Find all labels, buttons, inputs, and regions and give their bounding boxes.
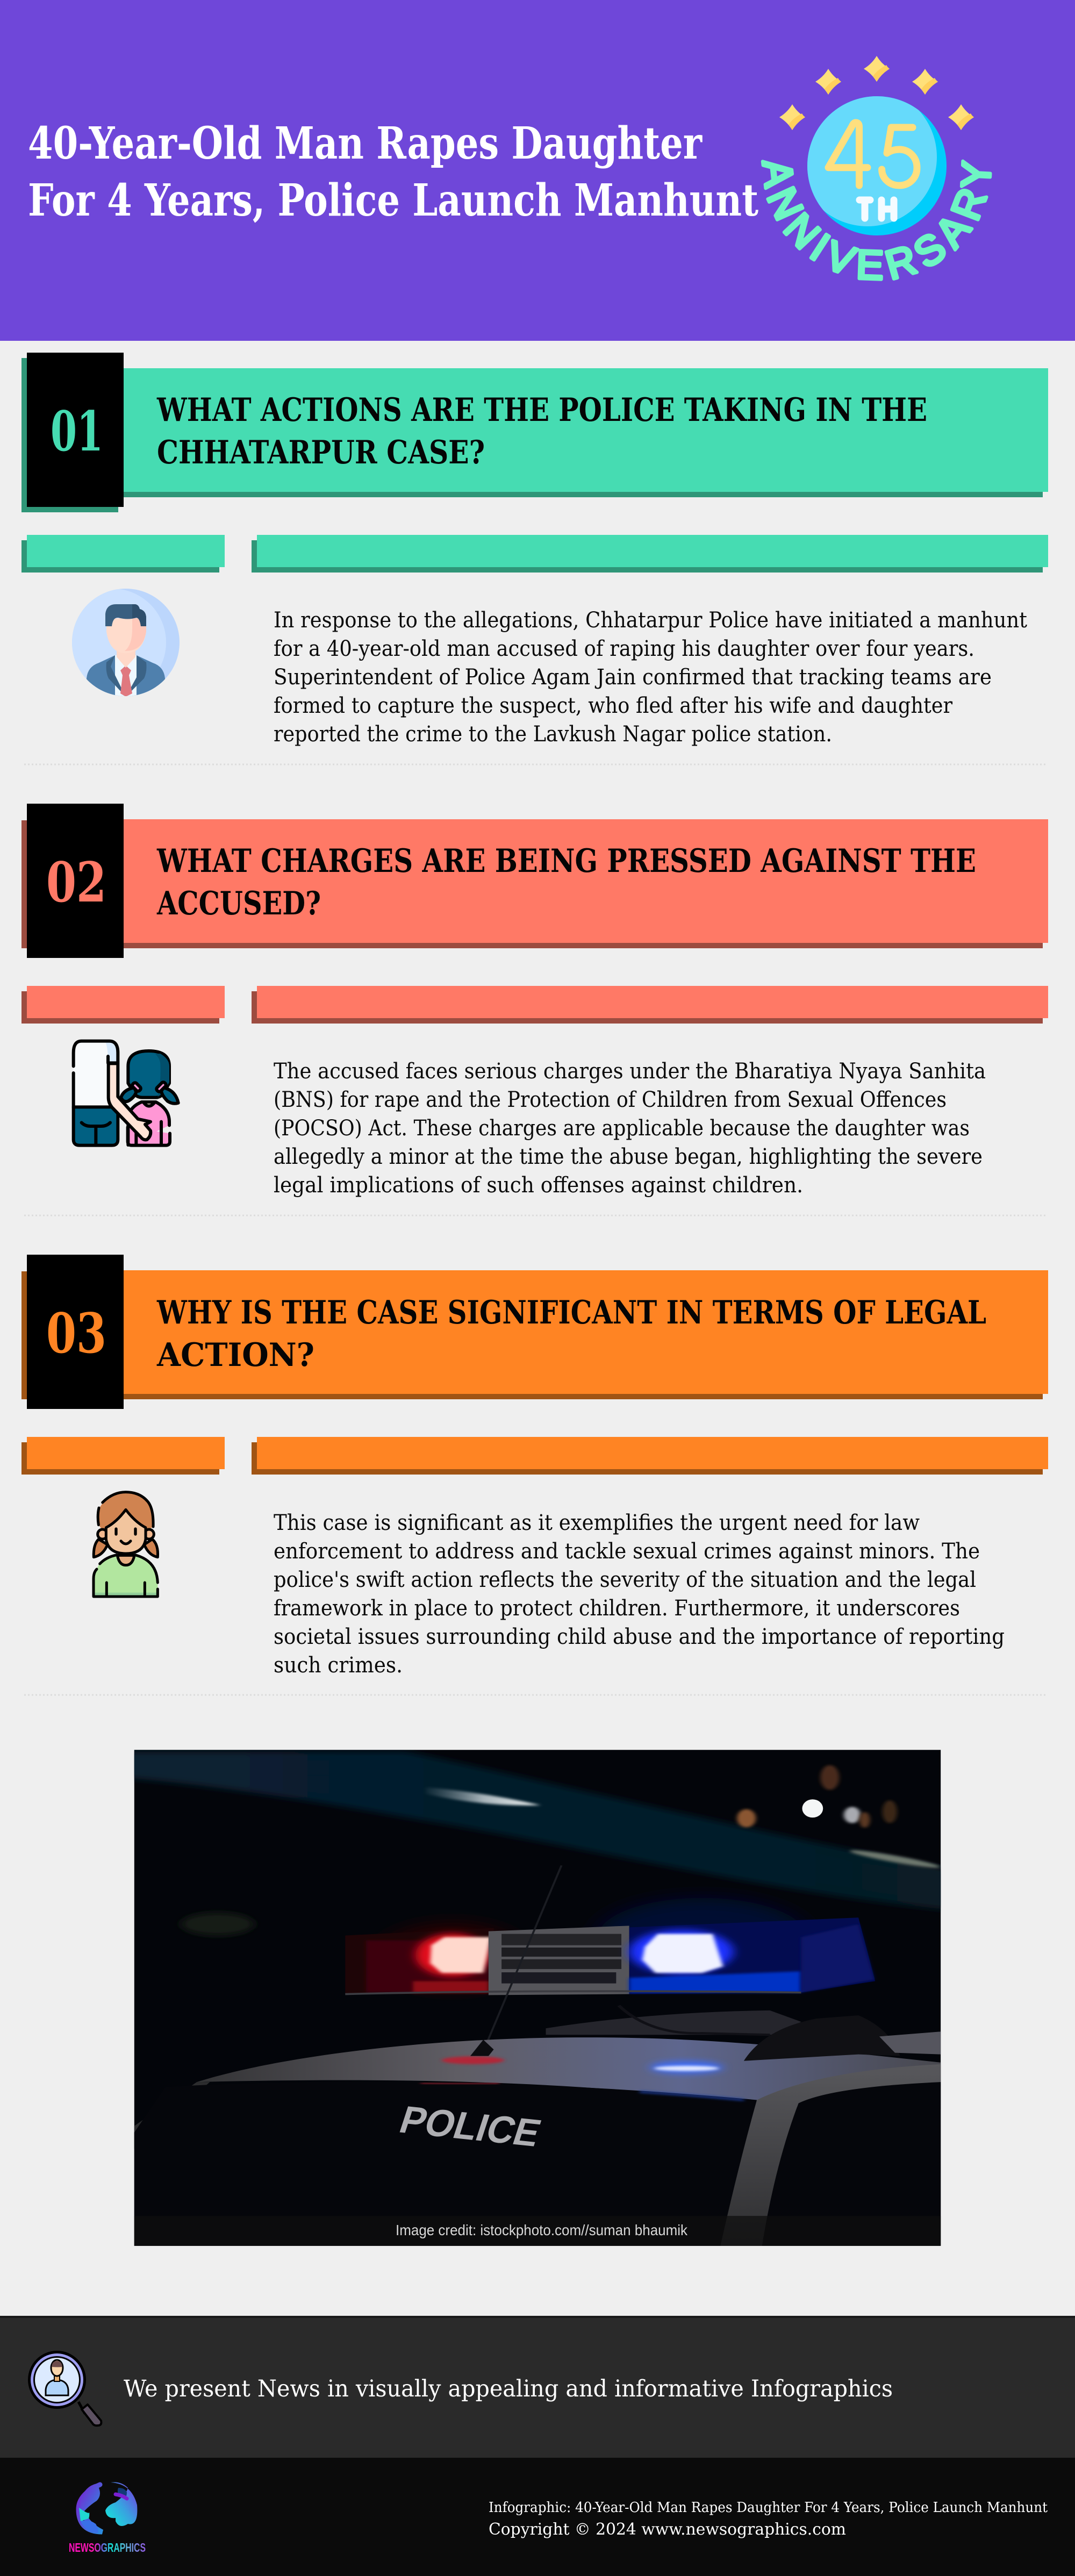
panel: section 03 bbox=[22, 1255, 1048, 1695]
number block: 01 bbox=[51, 399, 103, 464]
heading: ACTION? bbox=[156, 1336, 314, 1374]
panel: header bbox=[0, 0, 1075, 341]
heading bar bbox=[118, 819, 1048, 948]
body text: legal implications of such offenses against children. bbox=[274, 1173, 803, 1198]
body text: police's swift action reflects the severity of the situation and the legal bbox=[274, 1568, 976, 1592]
credit line: Infographic: 40-Year-Old Man Rapes Daughter For 4 Years, Police Launch Manhunt bbox=[489, 2500, 1048, 2516]
heading bar bbox=[118, 1270, 1048, 1399]
body text: Superintendent of Police Agam Jain confirmed that tracking teams are bbox=[274, 665, 992, 690]
number block bbox=[27, 804, 124, 958]
number block shadow bbox=[22, 358, 118, 512]
title: For 4 Years, Police Launch Manhunt bbox=[28, 175, 758, 226]
body text bbox=[274, 1059, 986, 1198]
image credit: Image credit: istockphoto.com//suman bhaumik bbox=[396, 2222, 688, 2238]
number block shadow bbox=[22, 820, 118, 948]
body text: such crimes. bbox=[274, 1653, 403, 1678]
right sub bar bbox=[252, 1437, 1048, 1475]
number block: 02 bbox=[46, 850, 106, 915]
photo: police car light bar at night bbox=[119, 1750, 963, 2246]
heading: CHHATARPUR CASE? bbox=[157, 434, 485, 471]
heading bar bbox=[118, 368, 1048, 497]
heading bbox=[156, 1294, 986, 1374]
heading: ACCUSED? bbox=[156, 885, 321, 922]
icon: 45th anniversary badge bbox=[761, 56, 992, 281]
body text: (BNS) for rape and the Protection of Children from Sexual Offences bbox=[274, 1087, 947, 1112]
title bbox=[28, 118, 758, 226]
left sub bar bbox=[22, 986, 225, 1024]
body text: framework in place to protect children. Furthermore, it underscores bbox=[274, 1596, 960, 1621]
body text: The accused faces serious charges under the Bharatiya Nyaya Sanhita bbox=[274, 1059, 986, 1084]
body text: for a 40-year-old man accused of raping his daughter over four years. bbox=[274, 636, 974, 661]
icon: 45th anniversary badge: ANNIVERSARY bbox=[761, 159, 992, 281]
left sub bar bbox=[22, 1437, 225, 1475]
tagline text: We present News in visually appealing and informative Infographics bbox=[124, 2375, 893, 2402]
icon: newsographics logo: NEWSOGRAPHICS bbox=[69, 2541, 146, 2554]
right sub bar bbox=[252, 535, 1048, 573]
body text bbox=[274, 608, 1027, 747]
body text: reported the crime to the Lavkush Nagar police station. bbox=[274, 722, 832, 747]
heading bbox=[156, 842, 976, 922]
body text: In response to the allegations, Chhatarpur Police have initiated a manhunt bbox=[274, 608, 1027, 633]
panel: section 02 bbox=[22, 804, 1048, 1215]
icon: man and child bbox=[74, 1041, 178, 1146]
panel: tagline band bbox=[0, 2316, 1075, 2458]
icon: newsographics logo bbox=[69, 2482, 146, 2554]
number block bbox=[27, 353, 124, 507]
panel: section 01 bbox=[22, 353, 1048, 764]
icon: businessman avatar bbox=[72, 589, 180, 696]
copyright line: Copyright © 2024 www.newsographics.com bbox=[489, 2520, 846, 2539]
number block bbox=[27, 1255, 124, 1409]
body text: This case is significant as it exemplifies the urgent need for law bbox=[274, 1511, 920, 1535]
heading bbox=[156, 391, 927, 471]
number block: 03 bbox=[46, 1301, 106, 1366]
body text: allegedly a minor at the time the abuse began, highlighting the severe bbox=[274, 1144, 983, 1169]
right sub bar bbox=[252, 986, 1048, 1024]
body text: enforcement to address and tackle sexual crimes against minors. The bbox=[274, 1539, 980, 1564]
icon: smiling girl bbox=[94, 1492, 158, 1597]
icon: magnifier with person bbox=[28, 2351, 101, 2425]
body text: societal issues surrounding child abuse and the importance of reporting bbox=[274, 1625, 1005, 1649]
body text: (POCSO) Act. These charges are applicable because the daughter was bbox=[274, 1116, 970, 1141]
left sub bar bbox=[22, 535, 225, 573]
body text bbox=[274, 1511, 1005, 1678]
heading: WHAT ACTIONS ARE THE POLICE TAKING IN THE bbox=[156, 391, 927, 429]
panel: footer bbox=[0, 2458, 1075, 2576]
text on the car: POLICE bbox=[395, 2099, 546, 2155]
title: 40-Year-Old Man Rapes Daughter bbox=[28, 118, 703, 169]
number block shadow bbox=[22, 1271, 118, 1399]
body text: formed to capture the suspect, who fled after his wife and daughter bbox=[274, 693, 953, 718]
